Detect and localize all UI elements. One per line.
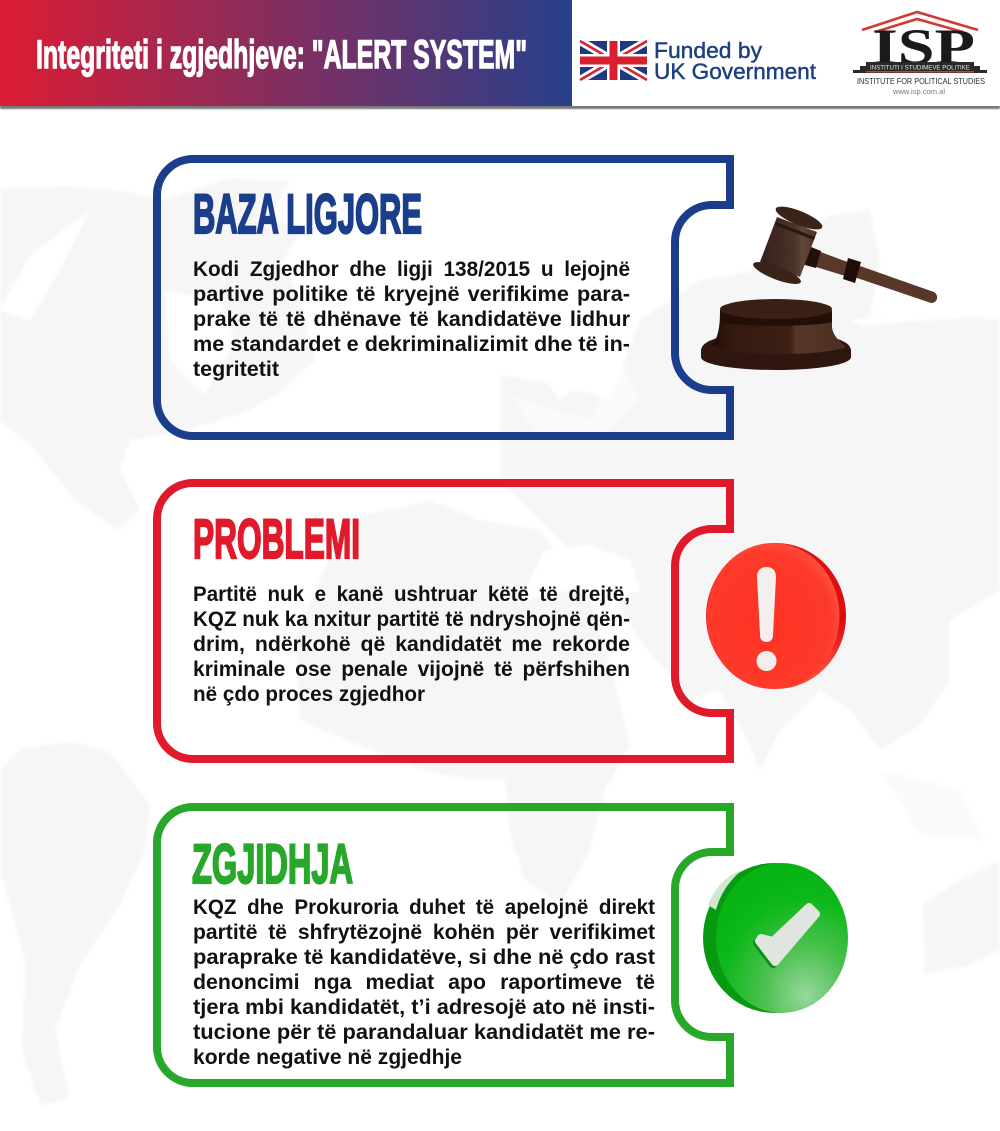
body text: korde negative në zgjedhje — [193, 1046, 462, 1069]
body text — [193, 896, 655, 1069]
exclamation bar — [757, 567, 776, 642]
panel border — [157, 807, 730, 1083]
panel border — [157, 483, 730, 759]
body text: Kodi Zgjedhor dhe ligji 138/2015 u lejojnë — [193, 258, 630, 281]
map: Australia — [922, 860, 1000, 975]
map: North America — [0, 178, 315, 530]
map: Eurasia — [500, 210, 1000, 770]
logo letters: ISP — [872, 20, 975, 76]
alert face — [706, 543, 840, 689]
map: white sea gaps — [0, 210, 1000, 600]
gavel neck — [801, 245, 821, 268]
logo roof — [862, 12, 978, 32]
gavel band — [843, 258, 861, 283]
panel border — [157, 159, 730, 436]
gavel top cap — [773, 202, 825, 234]
body text: tegritetit — [193, 358, 279, 381]
logo red strip — [866, 71, 974, 72]
gavel sound block body — [712, 310, 846, 354]
panel: problemi — [157, 483, 846, 759]
check rim — [703, 863, 845, 1013]
logo band text: INSTITUTI I STUDIMEVE POLITIKE — [870, 64, 971, 72]
gavel head — [760, 217, 817, 277]
logo stepped base — [853, 62, 987, 73]
logo url: www.isp.com.al — [892, 89, 945, 96]
map: Africa — [295, 500, 630, 905]
icon: gavel — [701, 202, 937, 370]
header white logo area — [572, 0, 1000, 106]
body text: KQZ dhe Prokuroria duhet të apelojnë direkt — [193, 896, 655, 919]
logo: ISP — [853, 12, 987, 96]
check mark — [759, 907, 816, 962]
panel: zgjidhja — [157, 807, 848, 1083]
gavel sound block base — [701, 333, 851, 370]
header bar — [0, 0, 1000, 109]
body text: paraprake të kandidatëve, si dhe në çdo rast — [193, 946, 655, 969]
body text: në çdo proces zgjedhor — [193, 683, 425, 706]
body text: prake të të dhënave të kandidatëve lidhur — [193, 308, 630, 331]
map: South East Asia islands — [880, 770, 985, 840]
panel: baza ligjore — [157, 159, 937, 436]
gavel sound block top — [720, 299, 832, 319]
body text: denoncimi nga mediat apo raportimeve të — [193, 971, 655, 994]
check mark shadow — [757, 909, 814, 964]
gavel handle — [816, 251, 937, 303]
icon: alert circle — [706, 543, 846, 689]
body text: tucione për të parandaluar kandidatët me re- — [193, 1021, 655, 1044]
gavel head groove — [775, 222, 815, 240]
map: South America — [0, 742, 150, 1105]
funder text: Funded by — [654, 38, 763, 63]
body text: tjera mbi kandidatët, t’i adresojë ato në insti- — [193, 996, 655, 1019]
title: Integriteti i zgjedhjeve: "ALERT SYSTEM" — [36, 33, 527, 77]
heading: BAZA LIGJORE — [193, 182, 422, 245]
gavel bottom cap — [751, 258, 803, 288]
funder text: UK Government — [654, 59, 817, 84]
body text — [193, 258, 630, 381]
check face — [716, 863, 848, 1013]
gavel sound block shadow band — [720, 311, 832, 326]
body text: Partitë nuk e kanë ushtruar këtë të drejtë, — [193, 583, 630, 606]
header gradient band — [0, 0, 572, 106]
check rim highlight — [708, 870, 742, 910]
body text: KQZ nuk ka nxitur partitë të ndryshojnë qën- — [193, 608, 630, 631]
heading: ZGJIDHJA — [192, 832, 353, 895]
icon: check circle — [703, 863, 848, 1013]
body text: drim, ndërkohë që kandidatët me rekorde — [193, 633, 630, 656]
alert rim — [706, 543, 846, 689]
exclamation dot — [756, 651, 776, 671]
body text: partitë të shfrytëzojnë kohën për verifikimet — [193, 921, 655, 944]
body text — [193, 583, 630, 706]
body text: partive politike të kryejnë verifikime para- — [193, 283, 630, 306]
icon: UK flag — [580, 41, 647, 80]
body text: me standardet e dekriminalizimit dhe të in- — [193, 333, 630, 356]
header shadow — [0, 105, 1000, 109]
funder text — [654, 38, 817, 84]
heading: PROBLEMI — [193, 507, 360, 570]
body text: kriminale ose penale vijojnë të përfshihen — [193, 658, 630, 681]
